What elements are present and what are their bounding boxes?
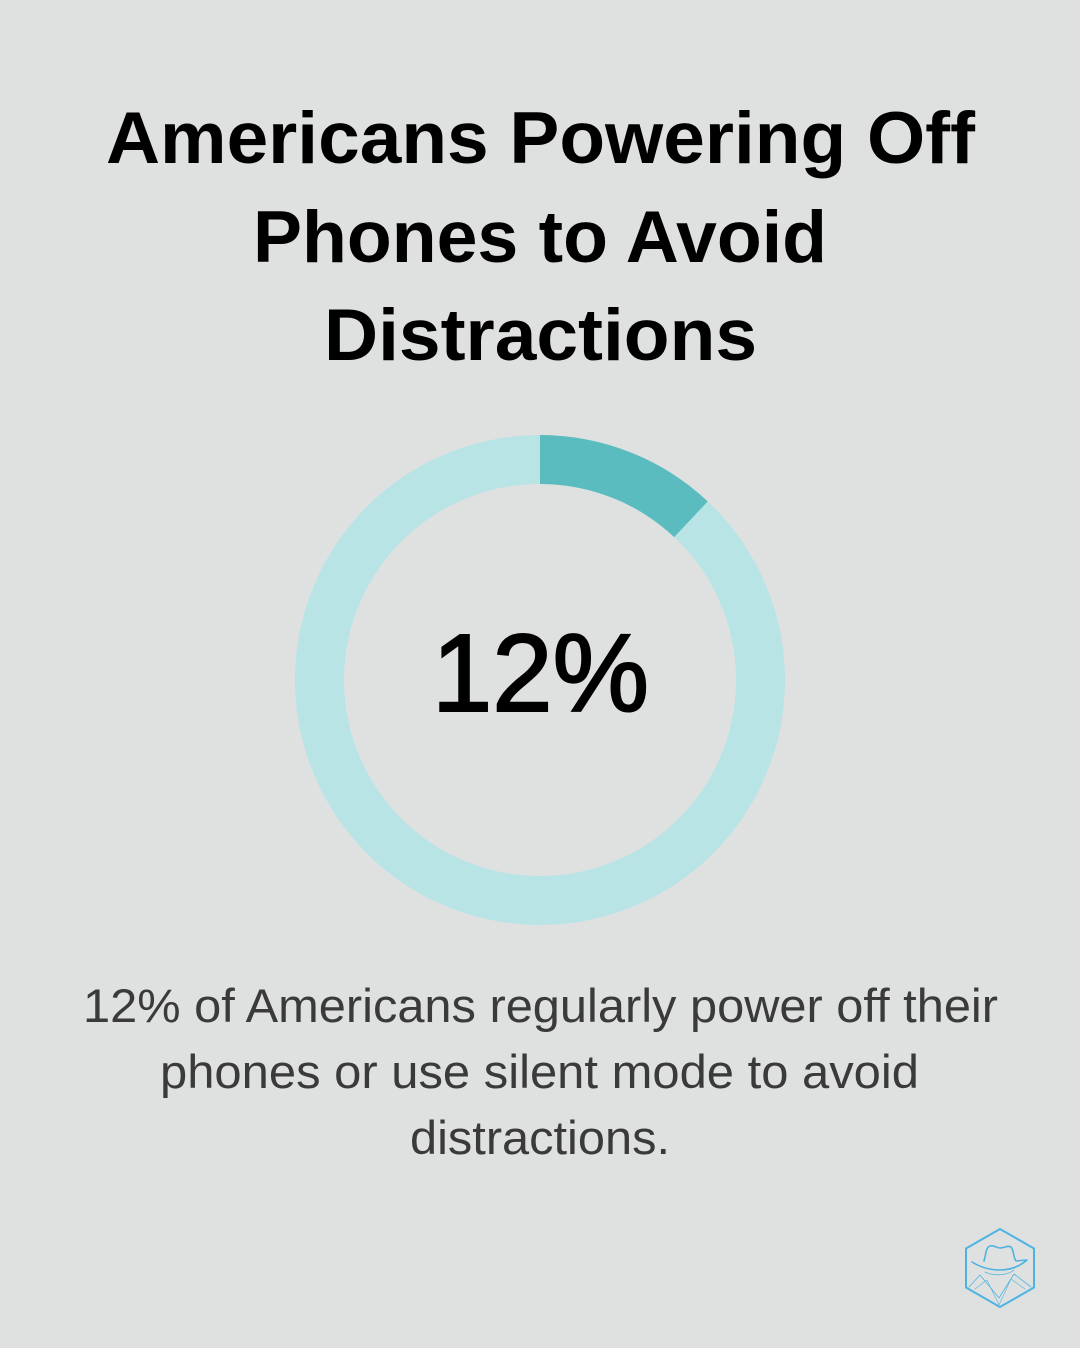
title: Americans Powering Off: [106, 98, 976, 179]
icon: hexagon logo with hat and coat: [966, 1229, 1034, 1307]
description text: 12% of Americans regularly power off their: [83, 979, 998, 1032]
description text: phones or use silent mode to avoid: [160, 1045, 919, 1098]
donut chart: 12%: [320, 435, 760, 900]
title: Distractions: [324, 295, 757, 376]
title: [106, 98, 976, 376]
description text: distractions.: [410, 1111, 670, 1164]
description text: [83, 979, 998, 1164]
donut value: 12%: [432, 612, 649, 735]
donut highlighted segment: [540, 435, 708, 537]
donut track: [320, 460, 760, 900]
title: Phones to Avoid: [253, 197, 827, 278]
